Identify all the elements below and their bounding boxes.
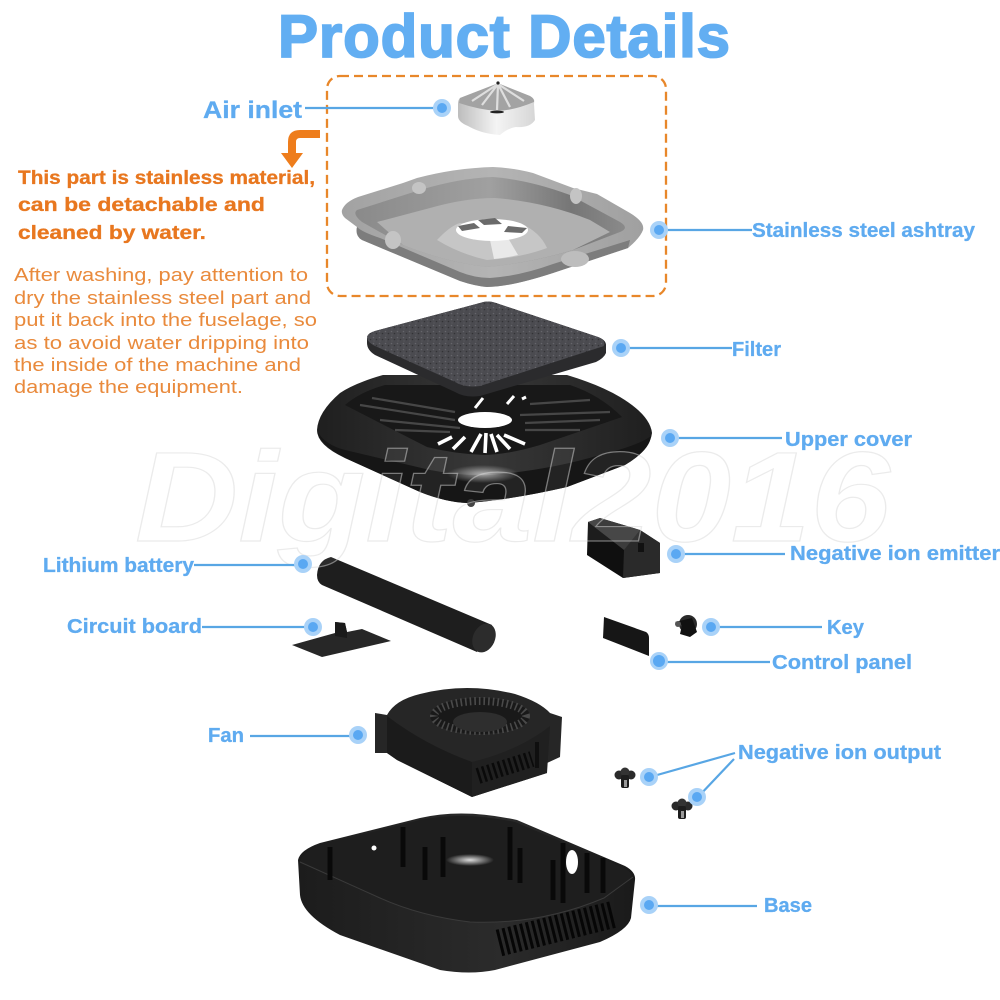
part: fan bbox=[375, 688, 562, 797]
label: filter: Filter bbox=[732, 339, 781, 361]
part: air inlet cap bbox=[458, 81, 535, 135]
label: stainless steel ashtray bbox=[650, 220, 976, 242]
part: stainless steel ashtray bbox=[342, 167, 643, 287]
label: filter bbox=[612, 339, 781, 361]
text block: washing note: After washing, pay attention to bbox=[14, 265, 308, 285]
part: lithium battery bbox=[317, 557, 500, 656]
label: fan: Fan bbox=[208, 725, 244, 747]
label: base bbox=[640, 895, 812, 917]
part: filter bbox=[367, 302, 606, 396]
part: base bbox=[298, 813, 635, 972]
label: negative ion emitter bbox=[667, 543, 1000, 565]
label: circuit board bbox=[67, 616, 322, 638]
label: circuit board: Circuit board bbox=[67, 616, 202, 638]
label: lithium battery bbox=[43, 555, 312, 577]
callout: stainless material: can be detachable and bbox=[18, 195, 265, 216]
text block: washing note: dry the stainless steel part and bbox=[14, 288, 311, 308]
label: negative ion output: Negative ion output bbox=[738, 742, 941, 764]
label: control panel: Control panel bbox=[772, 652, 912, 674]
callout: stainless material bbox=[18, 168, 315, 244]
part: circuit board bbox=[292, 622, 391, 657]
text block: washing note: the inside of the machine and bbox=[14, 355, 301, 375]
text block: washing note: as to avoid water dripping into bbox=[14, 333, 309, 353]
part: negative ion emitter bbox=[587, 518, 660, 578]
label: control panel bbox=[650, 652, 912, 674]
label: base: Base bbox=[764, 895, 812, 917]
label: upper cover: Upper cover bbox=[785, 429, 912, 451]
text block: washing note bbox=[14, 265, 317, 397]
part: key bbox=[675, 615, 697, 637]
label: stainless steel ashtray: Stainless steel ashtray bbox=[752, 220, 976, 242]
callout: stainless material: This part is stainless material, bbox=[18, 168, 315, 189]
title: Product Details bbox=[278, 3, 730, 70]
label: key: Key bbox=[827, 617, 865, 639]
part: upper cover bbox=[317, 375, 652, 507]
text block: washing note: put it back into the fuselage, so bbox=[14, 310, 317, 330]
label: lithium battery: Lithium battery bbox=[43, 555, 195, 577]
text block: washing note: damage the equipment. bbox=[14, 377, 243, 397]
label: upper cover bbox=[661, 429, 912, 451]
part: control panel bbox=[603, 617, 649, 656]
label: negative ion output bbox=[640, 742, 941, 806]
label: negative ion emitter: Negative ion emitter bbox=[790, 543, 1000, 565]
label: air inlet bbox=[203, 97, 451, 124]
watermark: Digital2016 bbox=[135, 426, 891, 569]
label: fan bbox=[208, 725, 367, 747]
part: negative ion output screws bbox=[614, 768, 692, 819]
callout: stainless material: cleaned by water. bbox=[18, 223, 206, 244]
label: key bbox=[702, 617, 865, 639]
label: air inlet: Air inlet bbox=[203, 97, 302, 124]
dashed highlight box bbox=[327, 76, 666, 296]
arrow: orange down arrow bbox=[281, 130, 320, 168]
